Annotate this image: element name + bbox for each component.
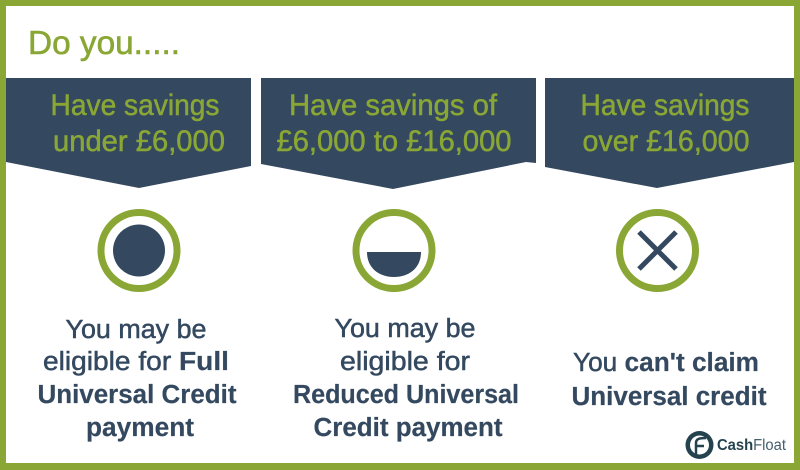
panel: savings of £6,000 to £16,000: Reduced Universal: [293, 381, 519, 409]
panel: savings under £6,000: eligible for Full: [43, 348, 229, 376]
banner 1 text: [50, 89, 225, 158]
banner 1: [6, 78, 251, 188]
banner 2 text: [276, 89, 512, 158]
panel: savings under £6,000: Universal Credit: [38, 381, 237, 409]
banner 3 text: Have savings: [580, 89, 750, 122]
icon: cross: [620, 212, 696, 288]
eligibility text: cannot claim: You can't claim: [573, 349, 759, 377]
panel: savings under £6,000: payment: [86, 414, 195, 442]
icon: full circle: [101, 212, 177, 288]
icon: logo mark: [686, 431, 714, 459]
panel: savings of £6,000 to £16,000: [261, 78, 536, 442]
banner 3: [545, 78, 794, 188]
panel: savings under £6,000: [6, 78, 251, 442]
logo wordmark: CashFloat: [717, 437, 787, 454]
banner 3 text: [580, 89, 750, 158]
banner 2 text: £6,000 to £16,000: [276, 125, 512, 158]
banner 2: [261, 78, 536, 189]
panel: savings of £6,000 to £16,000: eligible for: [340, 348, 471, 376]
icon: half circle: [356, 212, 432, 288]
eligibility text: full payment: You may be: [66, 316, 206, 344]
banner 2 text: Have savings of: [289, 89, 498, 122]
banner 1 text: under £6,000: [53, 125, 225, 158]
banner 1 text: Have savings: [50, 89, 220, 122]
eligibility text: reduced payment: You may be: [334, 315, 476, 343]
panel: savings over £16,000: [545, 78, 794, 411]
banner 3 text: over £16,000: [582, 125, 750, 158]
panel: savings of £6,000 to £16,000: Credit payment: [314, 414, 503, 442]
logo: CashFloat: [686, 431, 787, 459]
panel: savings over £16,000: Universal credit: [572, 383, 767, 411]
title: Do you.....: [28, 24, 180, 61]
